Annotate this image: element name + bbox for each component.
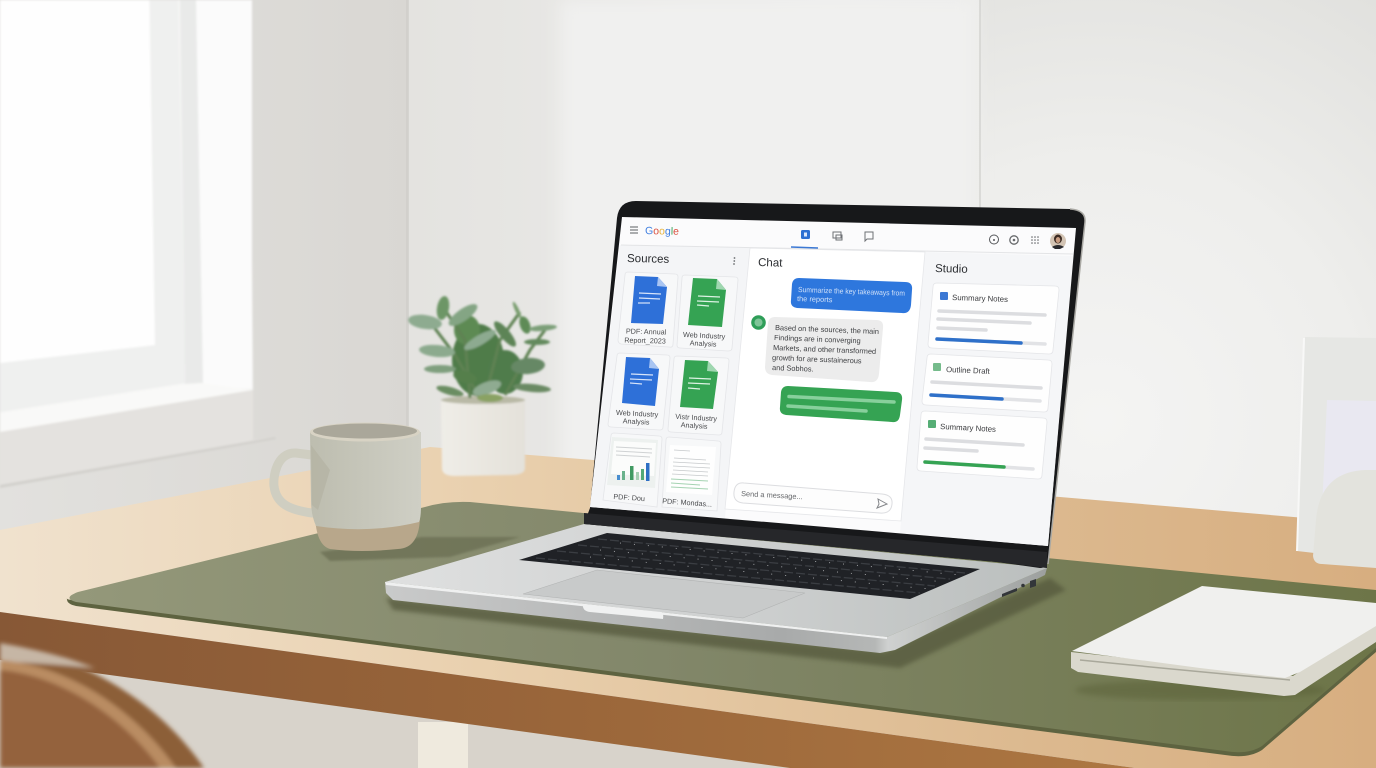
shadow of mug <box>320 537 520 561</box>
help icon <box>990 235 998 244</box>
studio card 2 <box>922 354 1052 412</box>
studio card 1: Summary Notes <box>952 293 1008 304</box>
laptop base <box>385 524 1047 653</box>
assistant reply bubble: and Sobhos. <box>772 363 814 374</box>
source labels: Web Industry <box>616 408 659 419</box>
settings icon <box>1010 236 1018 244</box>
assistant reply bubble: growth for are sustainerous <box>772 353 862 365</box>
source labels: Analysis <box>690 338 717 349</box>
apps grid icon <box>1031 236 1039 244</box>
menu dots <box>733 257 735 265</box>
lilac card <box>1322 400 1376 510</box>
laptop <box>385 201 1085 653</box>
avatar <box>1050 233 1066 249</box>
source cards <box>603 272 738 511</box>
send icon <box>877 499 887 508</box>
source labels: Analysis <box>623 416 650 427</box>
green reply bubble <box>780 386 902 422</box>
studio heading: Studio <box>935 263 968 276</box>
desk top <box>0 447 1376 768</box>
doc icon green 2 <box>680 360 718 409</box>
desk front edge <box>0 612 1135 768</box>
mug clay base <box>315 515 420 551</box>
assistant avatar <box>751 315 766 330</box>
source labels: Analysis <box>681 420 708 431</box>
top bar <box>630 225 1066 249</box>
coffee mug <box>274 422 421 551</box>
mug rim <box>310 422 420 442</box>
studio card 3 <box>917 411 1047 479</box>
studio card 1 <box>928 283 1059 354</box>
tab icon note <box>865 232 873 241</box>
chat panel <box>725 248 925 521</box>
plant <box>407 295 557 476</box>
notebook <box>1071 586 1376 700</box>
tab icon chat <box>833 232 842 240</box>
user message bubble <box>791 278 912 313</box>
mug handle <box>274 453 312 513</box>
active tab underline <box>791 247 818 248</box>
doc icon blue 2 <box>622 357 659 406</box>
sources column <box>603 253 738 511</box>
source labels: PDF: Annual <box>626 326 667 337</box>
assistant reply bubble: Findings are in converging <box>774 333 861 345</box>
source labels: PDF: Dou <box>613 492 645 503</box>
tab icon active <box>801 230 810 239</box>
assistant reply bubble: Markets, and other transformed <box>773 343 876 356</box>
plant leaves <box>407 295 557 402</box>
plant pot <box>441 396 525 476</box>
assistant reply bubble <box>765 317 883 382</box>
source labels: PDF: Mondas... <box>662 496 712 509</box>
under-desk area <box>0 612 1135 768</box>
studio card 2: Outline Draft <box>946 365 991 376</box>
screen <box>590 217 1076 546</box>
user message bubble: Summarize the key takeaways from <box>798 285 905 298</box>
desk leg <box>418 722 468 768</box>
chart thumbnail <box>607 437 658 488</box>
desk mat <box>67 502 1376 756</box>
arched holder <box>1313 470 1376 568</box>
laptop shadow <box>386 578 1066 668</box>
chair back <box>0 643 204 768</box>
sources heading: Sources <box>627 253 670 266</box>
mug body <box>310 432 421 529</box>
source labels: Web Industry <box>683 330 726 341</box>
doc icon green 1 <box>688 278 726 327</box>
source labels: Vistr Industry <box>675 412 718 423</box>
message input: Send a message... <box>741 489 803 501</box>
trackpad <box>523 570 805 618</box>
studio card 3: Summary Notes <box>940 422 996 434</box>
source labels: Report_2023 <box>624 335 666 346</box>
desk organizer <box>1297 337 1376 568</box>
keyboard <box>519 533 980 599</box>
laptop lid <box>584 201 1085 568</box>
chat heading: Chat <box>758 257 783 270</box>
Google logo: Google <box>645 225 679 238</box>
source labels <box>613 326 726 509</box>
hamburger icon <box>630 227 638 233</box>
window <box>0 0 276 488</box>
front notch <box>583 604 663 619</box>
ports <box>1002 579 1036 597</box>
hinge strip <box>584 513 1047 568</box>
document thumbnail <box>666 445 716 495</box>
studio panel background <box>900 252 1073 546</box>
white panel <box>1297 337 1376 560</box>
studio column <box>917 263 1059 479</box>
message input <box>734 483 892 513</box>
user message bubble: the reports <box>797 294 833 304</box>
chat column <box>734 257 912 513</box>
sources panel background <box>590 245 750 518</box>
doc icon blue 1 <box>631 276 667 324</box>
assistant reply bubble: Based on the sources, the main <box>775 323 879 336</box>
